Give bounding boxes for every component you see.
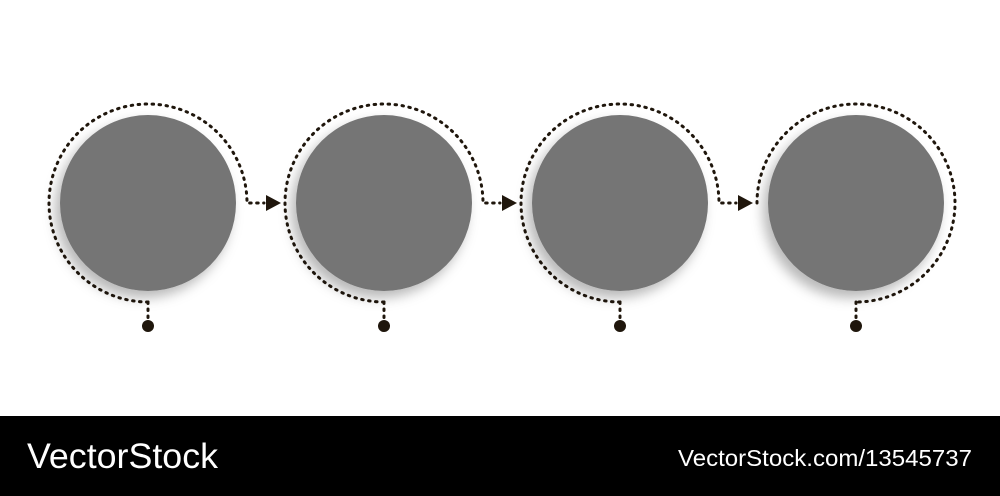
- dotted ring 3: [521, 104, 736, 302]
- dotted ring 4: [757, 104, 955, 302]
- step 4: [757, 104, 955, 332]
- footer logo text: VectorStock: [27, 437, 219, 476]
- circle 4: [768, 115, 944, 291]
- circle 3: [532, 115, 708, 291]
- connector 1: [142, 302, 154, 332]
- arrow 3: [738, 195, 753, 211]
- step 3: [521, 104, 753, 332]
- arrow 2: [502, 195, 517, 211]
- footer bar: [0, 416, 1000, 496]
- arrow 1: [266, 195, 281, 211]
- step 1: [49, 104, 281, 332]
- circle 2: [296, 115, 472, 291]
- step 2: [285, 104, 517, 332]
- dotted ring 2: [285, 104, 500, 302]
- connector 3: [614, 302, 626, 332]
- footer url text: VectorStock.com/13545737: [678, 445, 972, 471]
- connector 4: [850, 302, 862, 332]
- dotted ring 1: [49, 104, 264, 302]
- circle 1: [60, 115, 236, 291]
- connector 2: [378, 302, 390, 332]
